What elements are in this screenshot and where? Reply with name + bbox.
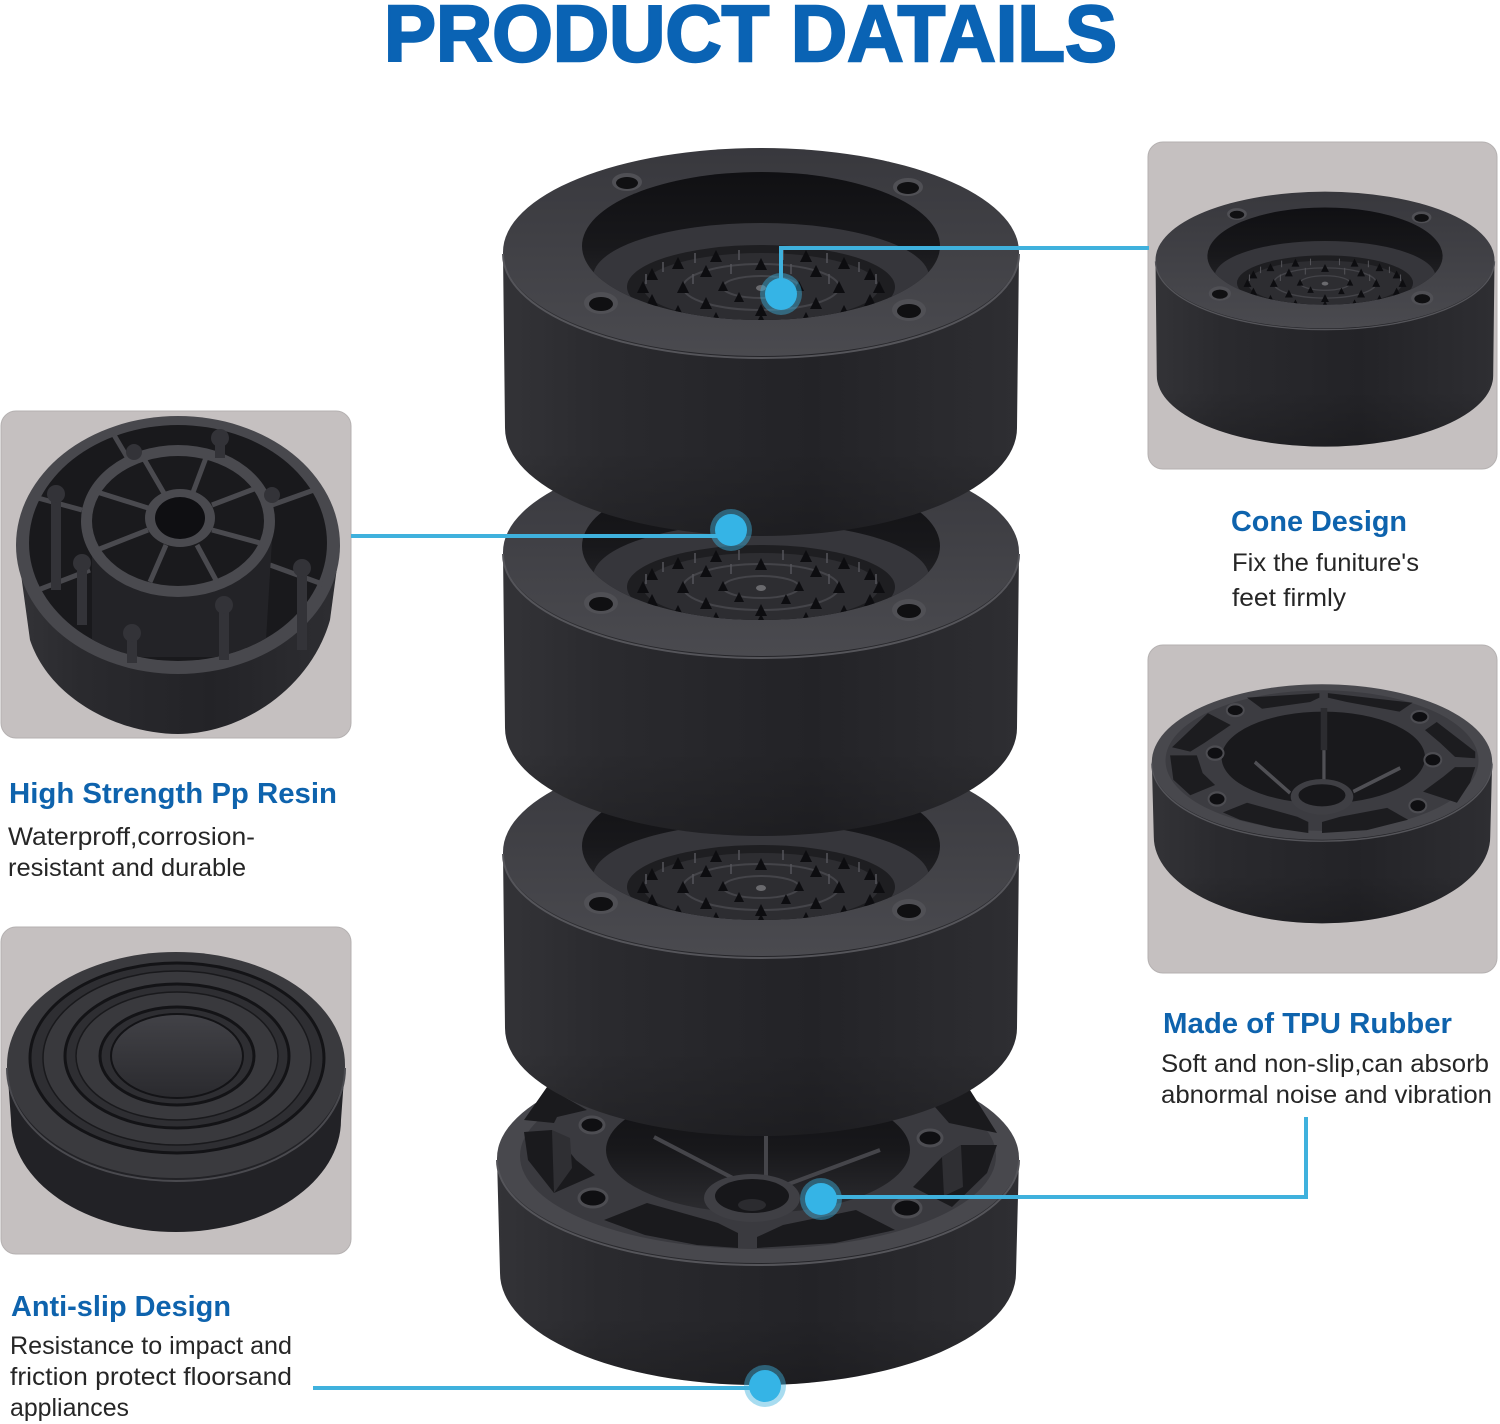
heading: cone design: Cone Design	[1231, 506, 1407, 538]
text: anti-slip description	[10, 1332, 292, 1422]
heading: anti-slip design: Anti-slip Design	[11, 1291, 231, 1323]
text: cone description: feet firmly	[1232, 584, 1347, 612]
panel: anti-slip photo	[1, 927, 351, 1254]
panel: PP resin photo	[1, 411, 351, 738]
panel: cone design photo	[1148, 142, 1497, 469]
heading: high strength pp resin: High Strength Pp Resin	[9, 778, 337, 810]
text: anti-slip description: friction protect floorsand	[10, 1363, 292, 1391]
text: tpu description: Soft and non-slip,can absorb	[1161, 1050, 1489, 1078]
callout: tpu rubber leader	[800, 1117, 1306, 1220]
text: anti-slip description: appliances	[10, 1394, 129, 1422]
foot 1	[503, 148, 1019, 536]
text: resin description: Waterproff,corrosion-	[8, 823, 255, 851]
text: tpu description	[1161, 1050, 1492, 1109]
text: cone description: Fix the funiture's	[1232, 549, 1419, 577]
callout: cone design leader	[760, 248, 1149, 315]
foot 3	[503, 748, 1019, 1136]
text: resin description	[8, 823, 255, 882]
heading: made of tpu rubber: Made of TPU Rubber	[1163, 1008, 1452, 1040]
text: anti-slip description: Resistance to impact and	[10, 1332, 292, 1360]
icon: foot underside view	[1152, 684, 1492, 923]
foot 2	[503, 448, 1019, 836]
text: tpu description: abnormal noise and vibration	[1161, 1081, 1492, 1109]
icon: foot ribbed inside view	[16, 416, 340, 734]
callout: anti-slip leader	[313, 1365, 786, 1407]
foot 4: upside-down base	[497, 1053, 1019, 1385]
product stack: four separated feet	[497, 148, 1019, 1385]
text: resin description: resistant and durable	[8, 854, 246, 882]
icon: ridged rubber bottom view	[7, 952, 345, 1232]
icon: foot top view	[1155, 192, 1495, 447]
panel: TPU rubber photo	[1148, 645, 1497, 973]
text: cone description	[1232, 549, 1419, 612]
callout: pp resin leader	[351, 509, 752, 551]
